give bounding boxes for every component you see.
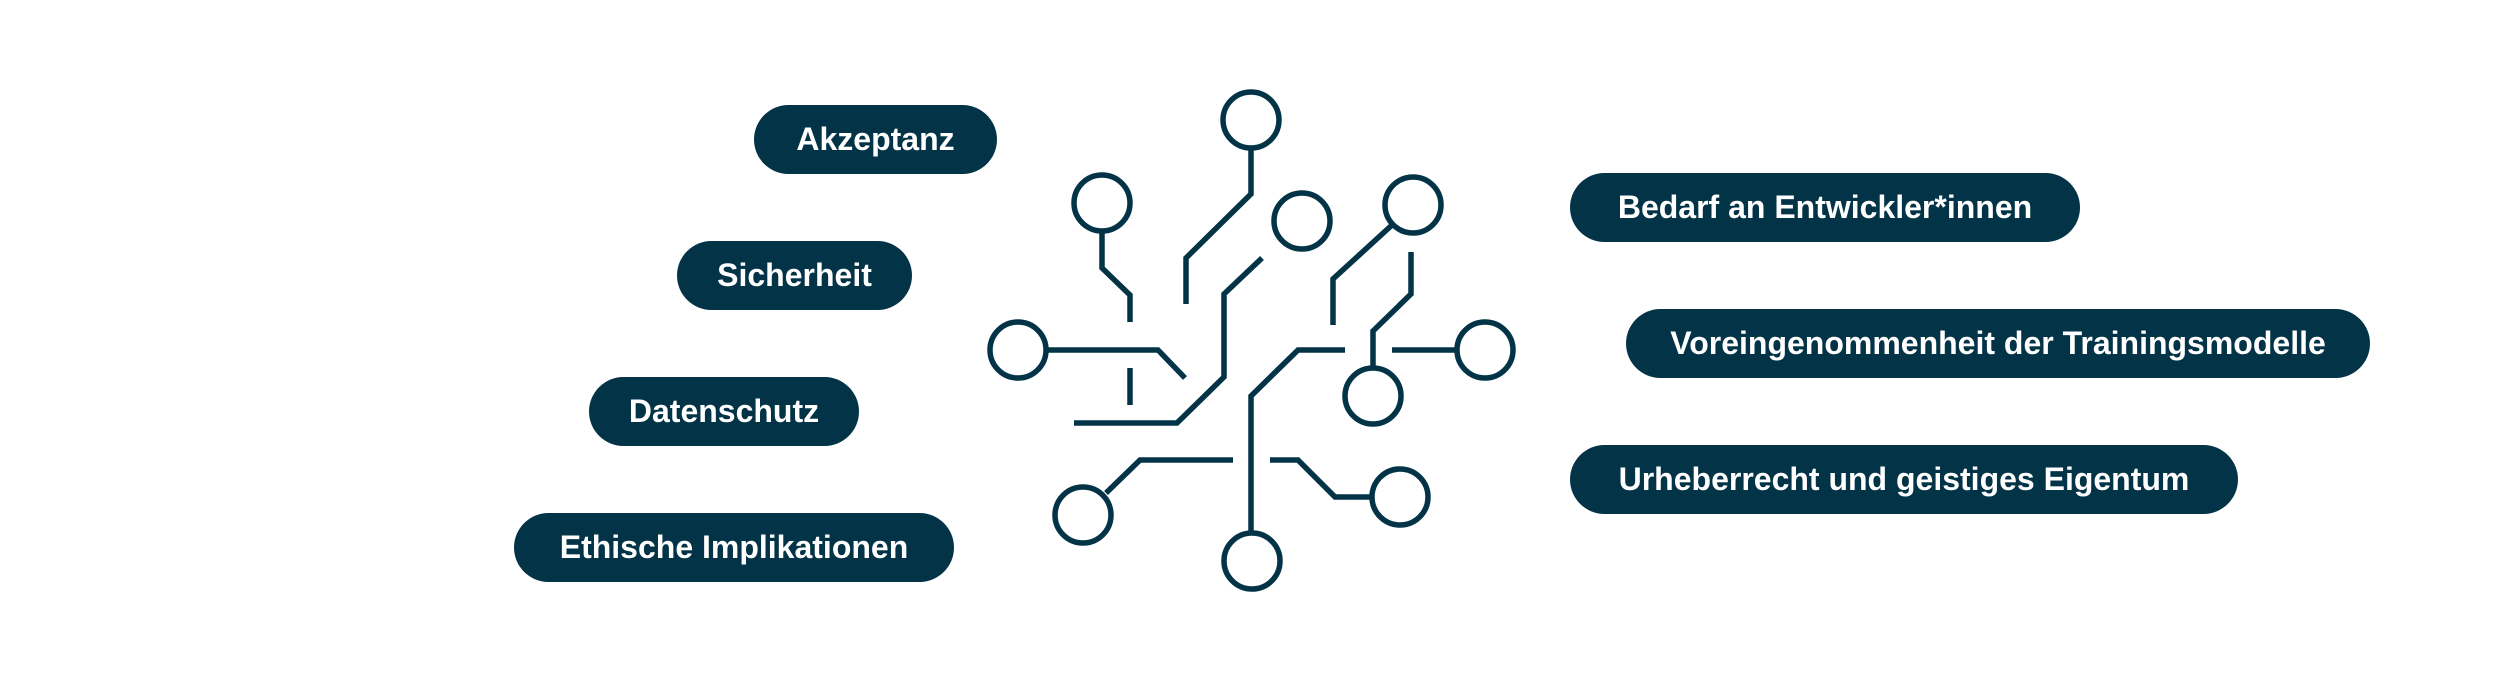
pill: Akzeptanz (754, 105, 997, 174)
pill: Urheberrecht und geistiges Eigentum: Urheberrecht und geistiges Eigentum (1619, 461, 2189, 497)
pill: Voreingenommenheit der Trainingsmodelle (1626, 309, 2370, 378)
pill: Sicherheit: Sicherheit (717, 257, 872, 293)
pill: Akzeptanz: Akzeptanz (796, 121, 955, 157)
pill: Sicherheit (677, 241, 912, 310)
pill: Voreingenommenheit der Trainingsmodelle: Voreingenommenheit der Trainingsmodelle (1670, 325, 2326, 361)
pill: Ethische Implikationen: Ethische Implikationen (560, 529, 908, 565)
pill: Bedarf an Entwickler*innen: Bedarf an Entwickler*innen (1618, 189, 2032, 225)
pill: Urheberrecht und geistiges Eigentum (1570, 445, 2238, 514)
pill: Datenschutz (589, 377, 859, 446)
pill: Ethische Implikationen (514, 513, 954, 582)
pill: Bedarf an Entwickler*innen (1570, 173, 2080, 242)
pill: Datenschutz: Datenschutz (629, 393, 819, 429)
